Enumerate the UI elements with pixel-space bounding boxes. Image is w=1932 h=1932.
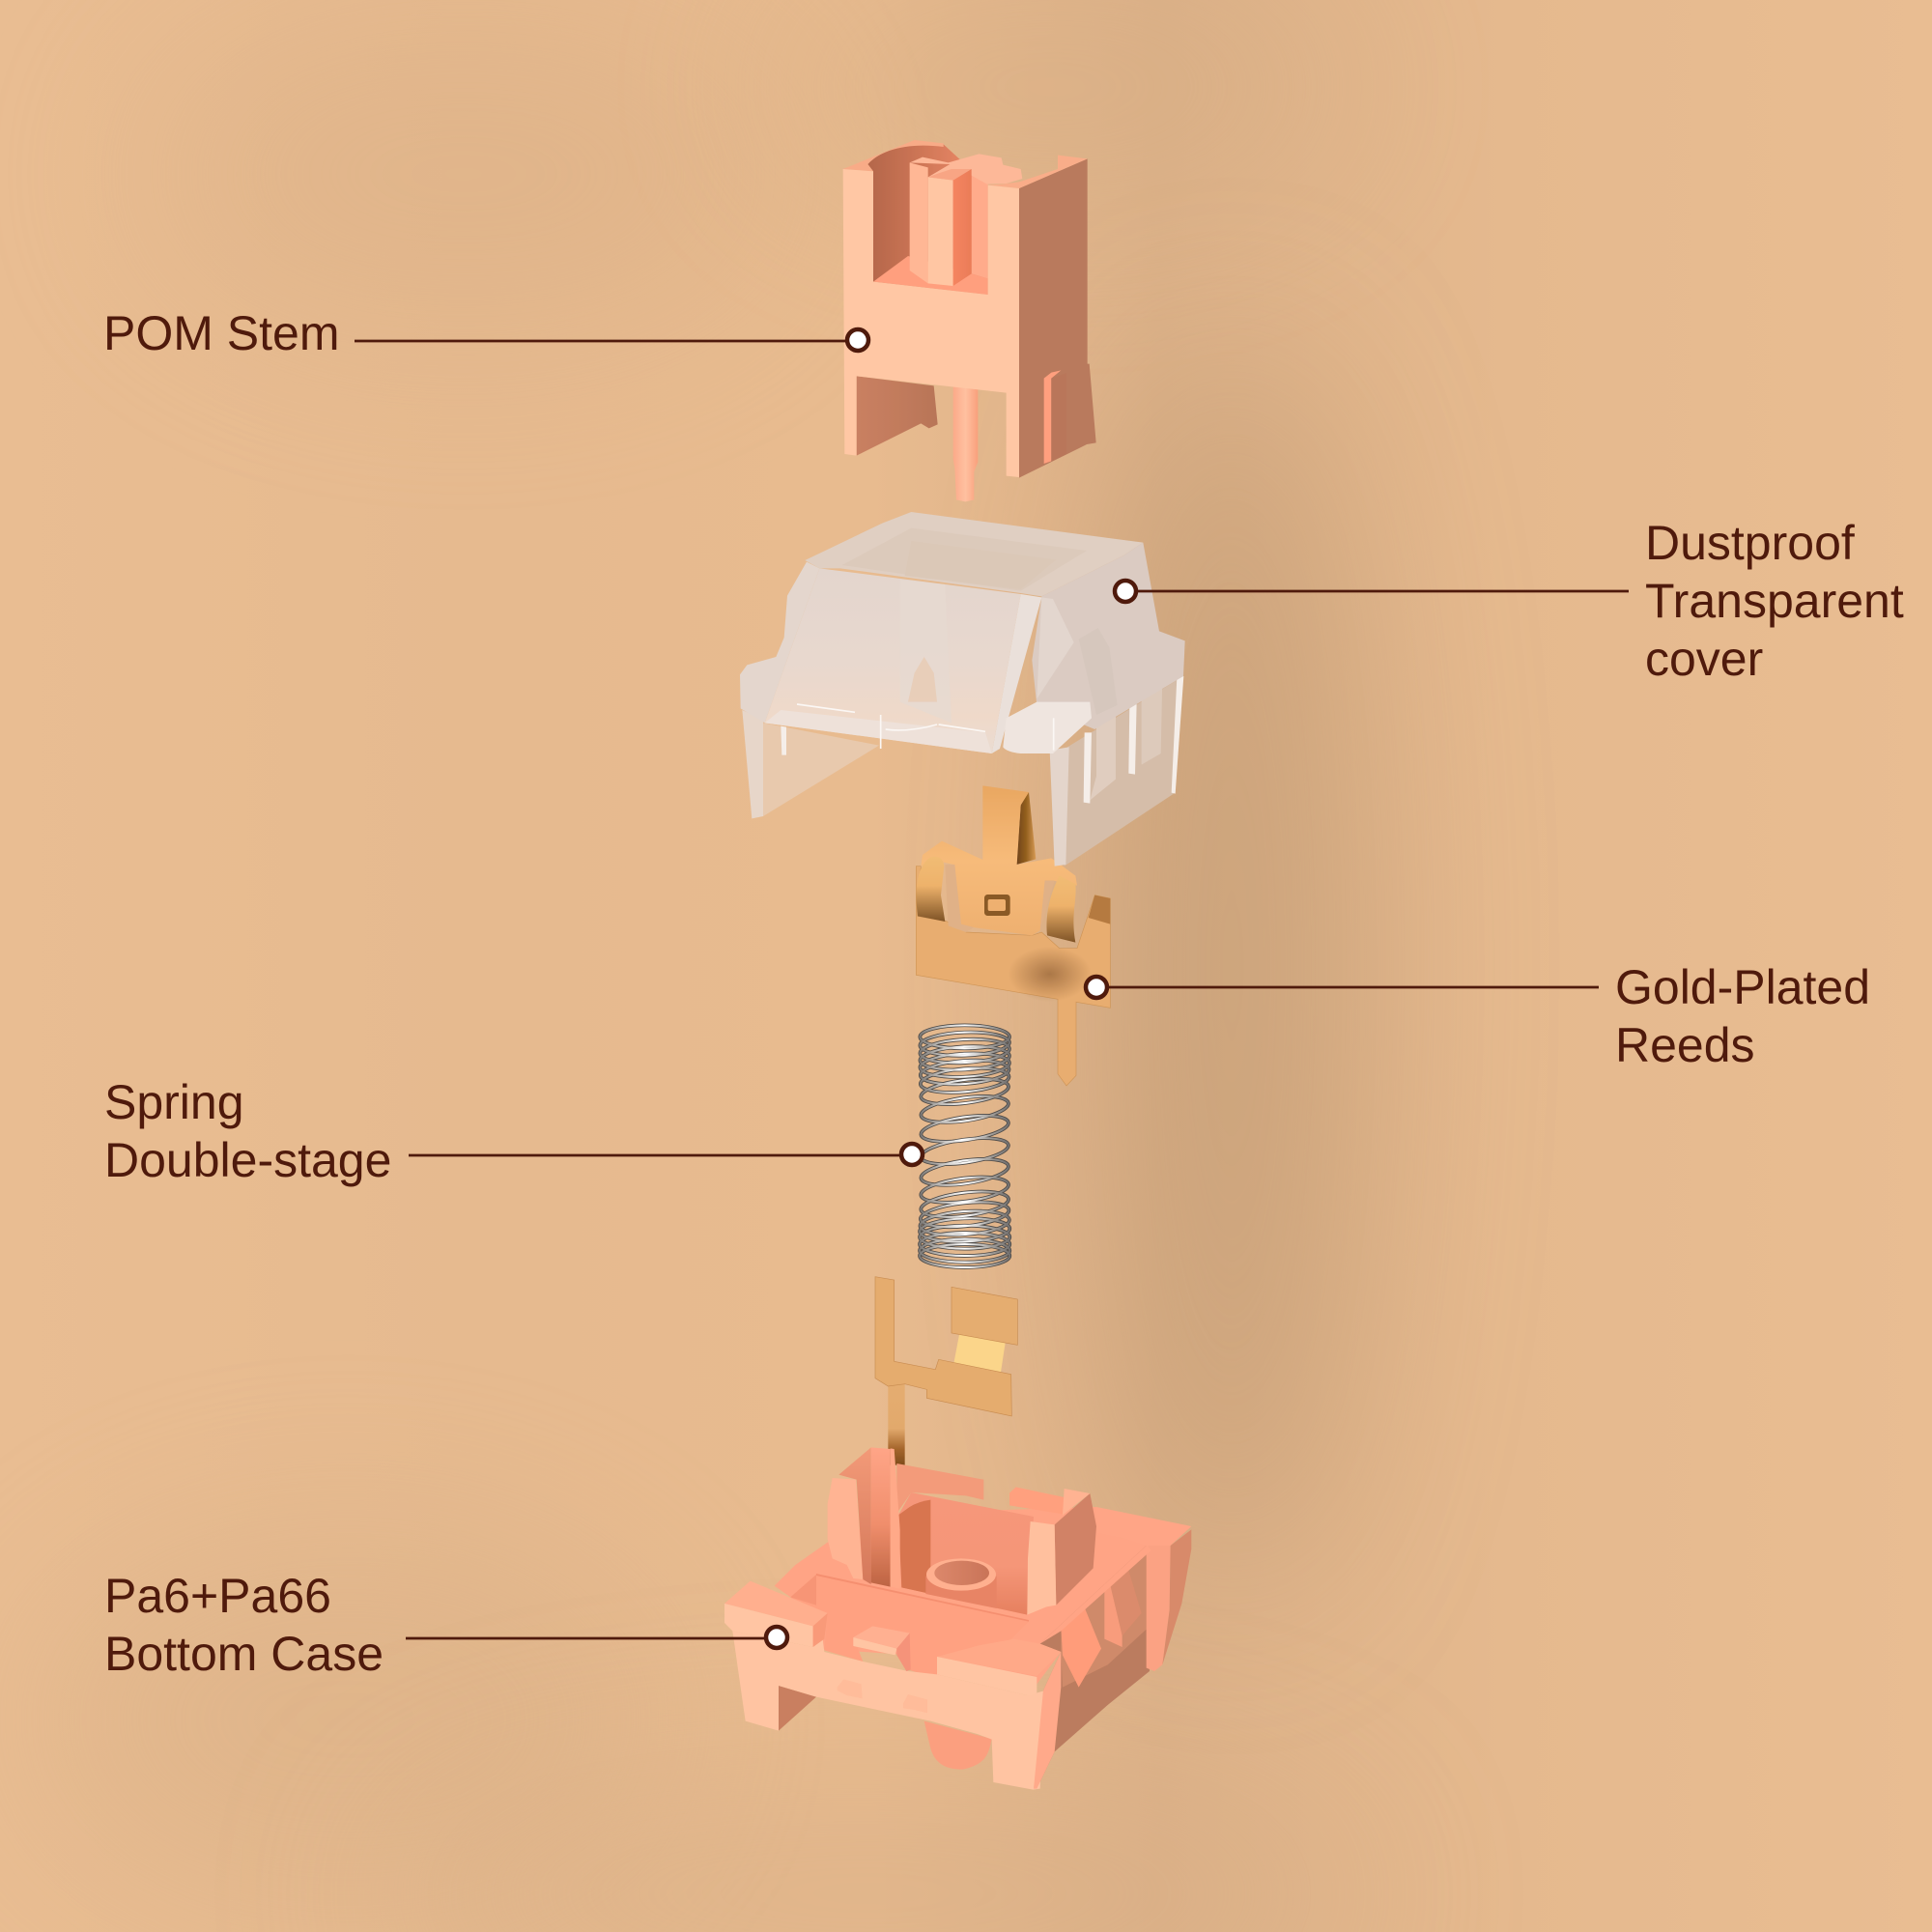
left plate top — [724, 1581, 828, 1626]
center tab side — [896, 1634, 911, 1671]
cover left inner wall — [763, 723, 879, 816]
case cup hole — [934, 1561, 989, 1585]
stem front post — [928, 177, 953, 286]
cover right leg — [1050, 747, 1069, 867]
label: Dustproof Transparent cover — [1115, 516, 1904, 686]
Dustproof text: Transparent — [1645, 574, 1904, 628]
right tower front — [1027, 1521, 1056, 1615]
cover front glass — [765, 568, 1021, 753]
right tower small block — [1009, 1487, 1065, 1514]
case right side mid band — [1061, 1548, 1147, 1688]
cover right slots second — [1142, 676, 1162, 765]
contact L plate — [875, 1277, 1011, 1416]
stem post side — [953, 169, 972, 286]
case front well — [790, 1575, 1029, 1681]
cover right slots — [1090, 705, 1116, 800]
Spring marker — [901, 1144, 923, 1165]
reed left cut out — [945, 865, 974, 932]
Dustproof text: Dustproof — [1645, 516, 1855, 570]
left tower inner — [838, 1447, 871, 1584]
stem side rib — [1044, 370, 1061, 464]
cover right chamfer face — [1037, 597, 1074, 698]
case stud under — [924, 1721, 992, 1770]
case well rim — [816, 1574, 1029, 1622]
stem rim left — [843, 140, 944, 171]
left tower edge strip — [891, 1448, 900, 1589]
case inner left strip — [898, 1500, 930, 1594]
case right side dark — [1034, 1545, 1150, 1789]
stem back post left — [910, 162, 928, 283]
dustproof transparent cover — [740, 512, 1185, 867]
Bottom case marker — [766, 1627, 787, 1648]
front wall — [732, 1631, 1043, 1790]
spring — [920, 1025, 1010, 1267]
stem chamfer — [928, 169, 972, 181]
left plate front — [724, 1604, 813, 1647]
right plate top — [937, 1639, 1061, 1676]
cover left side — [740, 562, 819, 723]
cover right ledge top — [1003, 702, 1092, 753]
right tower side — [1055, 1493, 1096, 1605]
stem cross top — [910, 154, 1022, 185]
cover right body — [1032, 543, 1185, 729]
left tower column — [871, 1447, 891, 1587]
Pa6+Pa66 bottom case — [724, 1447, 1191, 1790]
case deck base — [775, 1507, 1147, 1684]
front clip right — [903, 1694, 927, 1713]
case right corner strip — [1147, 1546, 1171, 1671]
contact yellow strip — [953, 1333, 1006, 1373]
cover right rib — [1079, 628, 1118, 715]
left tower outer — [828, 1478, 863, 1579]
contact lead — [888, 1384, 905, 1465]
Dustproof leader line — [1135, 590, 1629, 592]
case deck upper edge — [1040, 1545, 1151, 1644]
case back right deck — [1096, 1507, 1191, 1546]
case back wall — [896, 1463, 983, 1514]
gold reed — [916, 785, 1110, 1086]
label: POM Stem — [103, 306, 868, 360]
Gold-Plated text: Gold-Plated — [1615, 960, 1870, 1014]
cover right wall — [1065, 676, 1183, 867]
dustproof cover and reed stack — [740, 512, 1185, 1086]
stem back post right — [972, 169, 988, 278]
reed right curl — [1047, 876, 1076, 943]
reed plate — [916, 867, 1110, 1086]
Bottom case text: Pa6+Pa66 — [104, 1569, 331, 1623]
case right corner side — [1162, 1529, 1191, 1664]
case side panel — [1061, 1605, 1101, 1688]
label: Spring Double-stage — [104, 1075, 923, 1187]
Bottom case text: Bottom Case — [104, 1627, 384, 1681]
reed dimple window — [988, 899, 1006, 911]
reed right cut out — [1040, 881, 1055, 930]
cover front chamfer strip — [765, 710, 992, 753]
cover peach stem reflection — [908, 657, 937, 702]
Gold-Plated text: Reeds — [1615, 1018, 1755, 1072]
stem right side — [1019, 158, 1096, 478]
Gold-Plated leader line — [1106, 986, 1599, 988]
reed dimple — [984, 895, 1010, 916]
Dustproof marker — [1115, 581, 1136, 602]
cover top frame — [805, 512, 1143, 596]
POM Stem leader line — [355, 340, 848, 342]
center tab front — [853, 1637, 896, 1655]
lower gold contact — [875, 1277, 1017, 1465]
cover opening — [842, 528, 1087, 591]
POM Stem marker — [847, 329, 868, 351]
label: Pa6+Pa66 Bottom Case — [104, 1569, 787, 1681]
right tower top — [1063, 1489, 1090, 1515]
center tab top — [853, 1626, 910, 1649]
stem floor — [873, 256, 988, 295]
label: Gold-Plated Reeds — [1086, 960, 1870, 1072]
cover right chamfer — [992, 594, 1041, 753]
stem side shade line — [1051, 373, 1066, 461]
reed left curl — [917, 857, 945, 922]
case well left face — [790, 1575, 816, 1605]
front right edge — [1034, 1652, 1061, 1789]
reed notch dark — [1089, 895, 1110, 924]
cover opening back wall — [905, 541, 1056, 589]
reed shaded spot — [1008, 947, 1092, 1002]
Spring text: Double-stage — [104, 1133, 391, 1187]
cover center column — [900, 580, 952, 723]
contact upper plate — [952, 1287, 1017, 1345]
left plate side — [813, 1613, 828, 1647]
stem front face — [843, 169, 1019, 477]
stem pin — [953, 386, 978, 501]
Spring text: Spring — [104, 1075, 244, 1129]
Dustproof text: cover — [1645, 632, 1763, 686]
stem front leg interior — [857, 376, 938, 456]
reed top piece — [921, 785, 1077, 935]
right plate front — [937, 1657, 1037, 1695]
cover white highlights — [797, 704, 1054, 751]
POM stem (exploded part) — [843, 140, 1096, 501]
Spring leader line — [409, 1154, 902, 1156]
case cup body — [925, 1577, 997, 1608]
reed fold — [1016, 792, 1036, 865]
case side fin — [1104, 1581, 1122, 1647]
case inner back — [898, 1492, 1034, 1615]
Gold-Plated marker — [1086, 977, 1107, 998]
cover white slot edges — [781, 676, 1183, 804]
Bottom case leader line — [406, 1637, 767, 1639]
POM Stem text: POM Stem — [103, 306, 339, 360]
case side panel second — [1109, 1565, 1142, 1635]
front clip left — [838, 1679, 863, 1698]
cover left leg — [742, 710, 763, 818]
leg interior — [779, 1686, 816, 1731]
stem rim right — [988, 156, 1088, 188]
stem window interior — [867, 144, 988, 295]
case cup rim — [926, 1558, 996, 1591]
